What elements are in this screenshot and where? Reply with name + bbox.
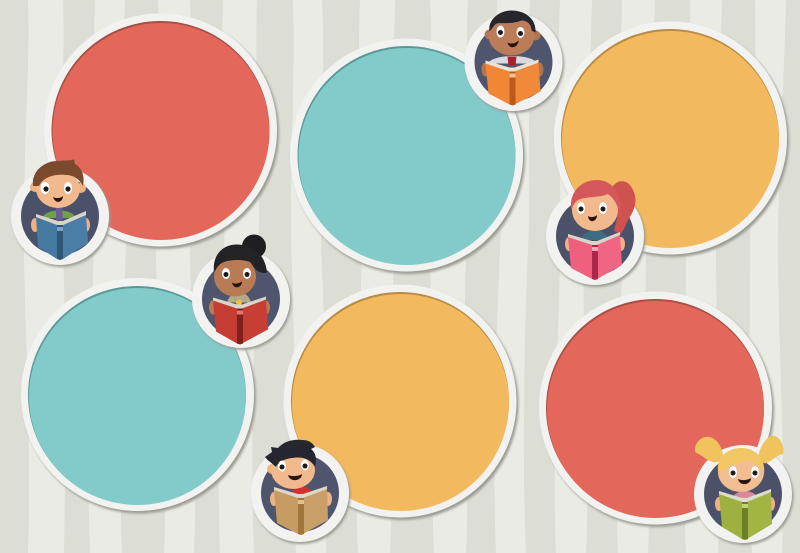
- panel: teal circle top centre: [290, 38, 525, 274]
- green book: [719, 489, 772, 540]
- pigtails: [695, 436, 784, 463]
- tan book: [274, 486, 328, 535]
- hair: [265, 440, 316, 467]
- blue book: [36, 211, 88, 260]
- orange book: [486, 60, 540, 106]
- hair: [214, 244, 267, 273]
- panel: orange circle bottom centre: [284, 284, 518, 520]
- ponytail: [613, 181, 635, 235]
- hair: [718, 448, 764, 474]
- badge: girl with red book: [192, 234, 292, 350]
- panel: orange circle top right: [554, 22, 789, 257]
- badge: blonde girl with green book: [694, 436, 794, 545]
- hair: [571, 180, 621, 218]
- panel: red circle bottom right: [539, 292, 774, 527]
- hair: [489, 10, 536, 32]
- badge: boy with blue book: [11, 159, 110, 267]
- pink book: [568, 232, 622, 280]
- panel: teal circle bottom left: [21, 278, 256, 514]
- red book: [213, 296, 268, 344]
- panel: red circle top left: [44, 14, 279, 249]
- badge: boy with orange book: [464, 10, 564, 113]
- hair: [33, 159, 84, 186]
- badge: red-haired girl with pink book: [546, 180, 646, 287]
- badge: boy with tan book: [251, 440, 350, 544]
